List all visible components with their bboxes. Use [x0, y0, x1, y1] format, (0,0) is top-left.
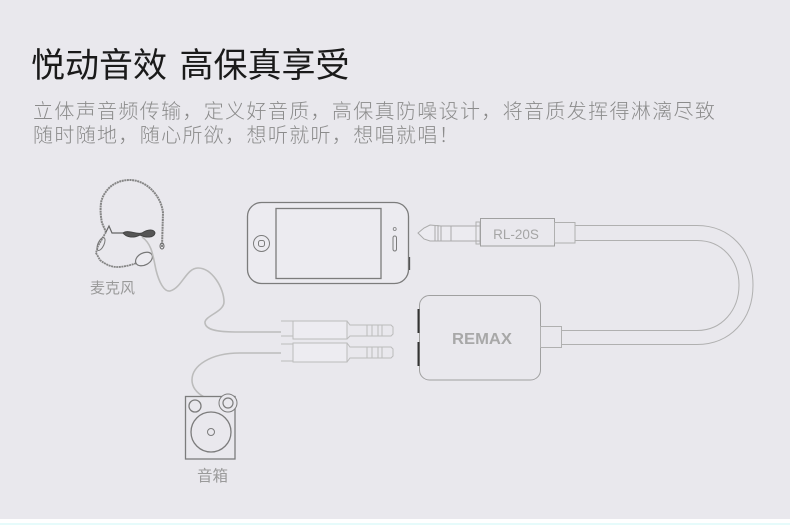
splitter box REMAX: REMAX — [452, 331, 513, 348]
splitter box REMAX — [418, 296, 562, 380]
title: 悦动音效 高保真享受 — [31, 47, 349, 85]
audio jack RL-20S: RL-20S — [493, 227, 539, 242]
label: speaker: 音箱 — [197, 467, 228, 485]
speaker cable — [192, 353, 281, 397]
icon: phone — [248, 202, 410, 284]
audio jack RL-20S — [418, 218, 575, 246]
description text: 立体声音频传输，定义好音质，高保真防噪设计，将音质发挥得淋漓尽致 — [33, 101, 716, 123]
label: microphone: 麦克风 — [90, 280, 135, 297]
microphone cable — [142, 237, 281, 332]
stereo plugs — [281, 321, 393, 362]
description text — [33, 101, 716, 147]
description text: 随时随地，随心所欲，想听就听，想唱就唱！ — [33, 125, 460, 147]
cable loop — [561, 226, 753, 344]
icon: headset microphone — [95, 180, 164, 269]
icon: speaker — [186, 394, 237, 459]
